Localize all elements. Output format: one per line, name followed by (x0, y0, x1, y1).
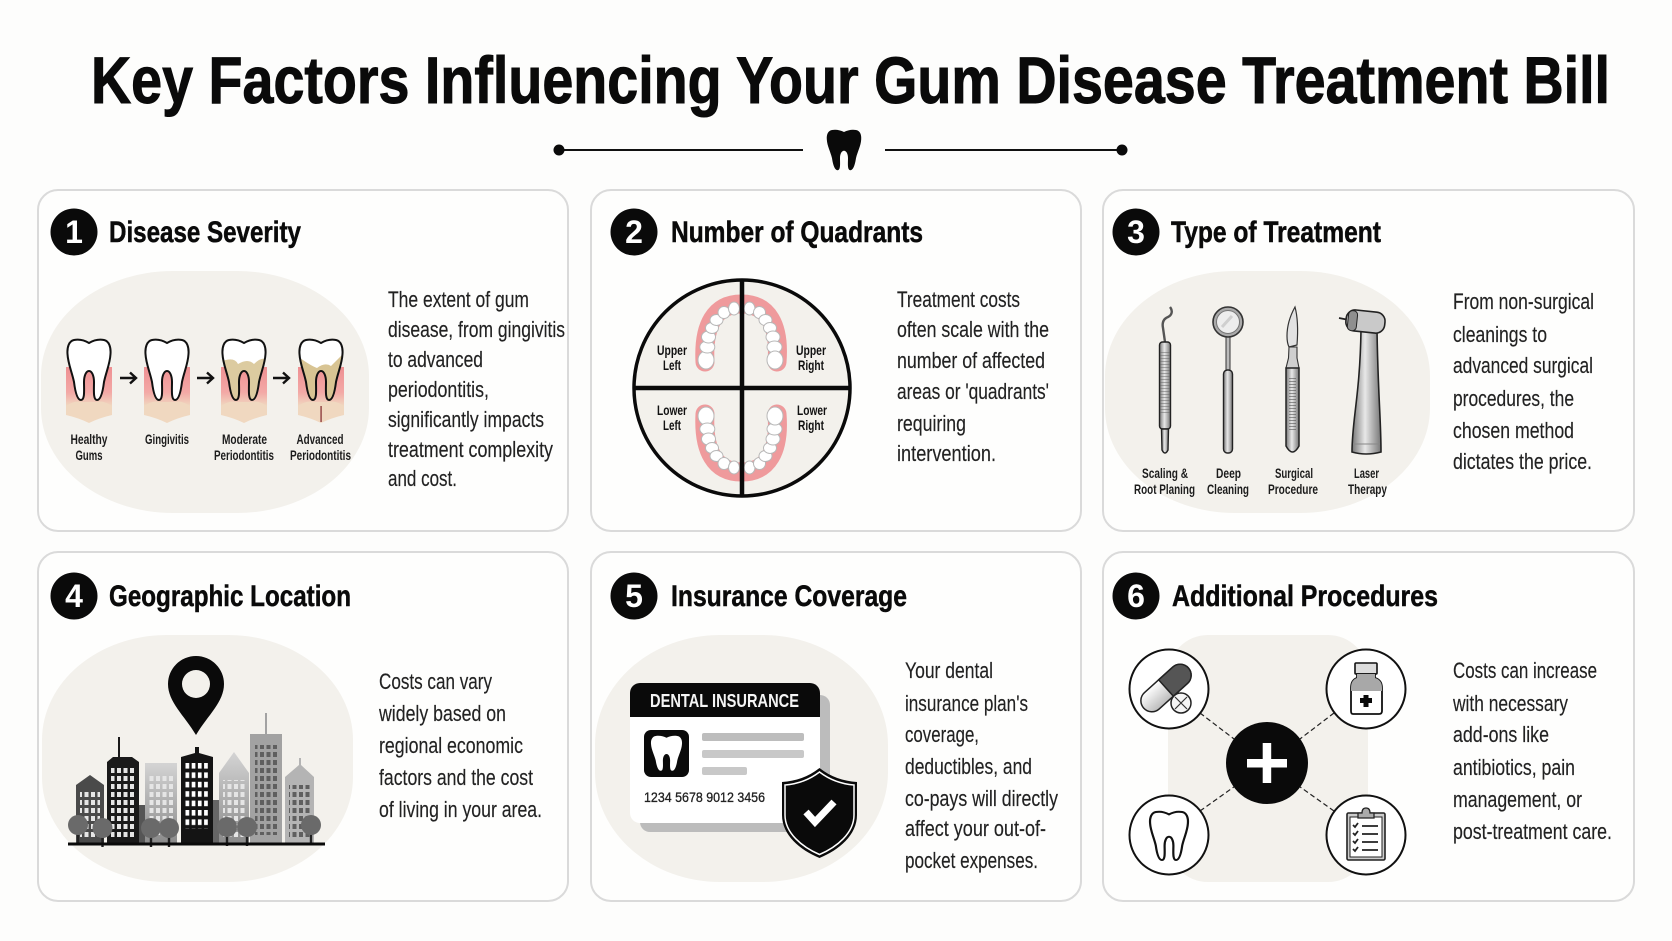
panel: insurance coverage (591, 552, 1081, 901)
number badge 1: 1 (65, 214, 83, 250)
description text (897, 287, 1049, 466)
icon: shield with check (782, 768, 857, 858)
heading: insurance coverage: Insurance Coverage (671, 580, 907, 613)
description text: regional economic (379, 733, 523, 758)
illustration backdrop (42, 635, 353, 882)
quadrant mouth diagram: Upper (657, 342, 687, 358)
panel: geographic location (38, 552, 568, 901)
description text: and cost. (388, 466, 457, 491)
description text: pocket expenses. (905, 848, 1038, 873)
description text: The extent of gum (388, 287, 529, 312)
number badge 3: 3 (1127, 214, 1145, 250)
icon: medicine bottle (1326, 650, 1406, 728)
panel: disease severity (38, 190, 568, 531)
description text: dictates the price. (1453, 449, 1592, 474)
heading: type of treatment: Type of Treatment (1171, 216, 1381, 249)
icon: clipboard checklist (1326, 796, 1406, 874)
description text: disease, from gingivitis (388, 317, 565, 342)
description text: procedures, the (1453, 386, 1574, 411)
panel: number of quadrants (591, 190, 1081, 531)
number badge 3 (1112, 208, 1160, 256)
description text: cleanings to (1453, 322, 1547, 347)
progression arrows (120, 372, 289, 384)
description text: periodontitis, (388, 377, 489, 402)
stage labels: Periodontitis (290, 448, 351, 463)
description text: areas or 'quadrants' (897, 379, 1049, 404)
icon: location pin (168, 656, 224, 735)
instrument labels: Scaling & (1142, 466, 1188, 481)
quadrant mouth diagram (634, 280, 850, 496)
stage labels: Gingivitis (145, 432, 189, 447)
quadrant mouth diagram: Lower (657, 402, 687, 418)
illustration backdrop (595, 635, 888, 882)
heading: disease severity: Disease Severity (109, 216, 301, 249)
instrument labels: Cleaning (1207, 482, 1249, 497)
instrument labels: Therapy (1348, 482, 1387, 497)
number badge 2: 2 (625, 214, 643, 250)
description text (905, 658, 1058, 873)
description text: intervention. (897, 441, 996, 466)
description text: factors and the cost (379, 765, 533, 790)
heading: additional procedures: Additional Procedures (1172, 580, 1438, 613)
description text: Your dental (905, 658, 993, 683)
description text: Treatment costs (897, 287, 1020, 312)
description text: Costs can vary (379, 669, 492, 694)
stage labels: Moderate (222, 432, 267, 447)
description text: chosen method (1453, 418, 1574, 443)
insurance card: 1234 5678 9012 3456 (644, 789, 765, 805)
description text: treatment complexity (388, 437, 553, 462)
stage labels: Advanced (296, 432, 344, 447)
description text: insurance plan's (905, 691, 1028, 716)
number badge 4: 4 (65, 578, 83, 614)
description text (388, 287, 565, 491)
description text: From non-surgical (1453, 289, 1594, 314)
description text: coverage, (905, 722, 979, 747)
gum disease progression teeth (66, 340, 345, 423)
description text: advanced surgical (1453, 353, 1593, 378)
quadrant mouth diagram: Left (663, 357, 681, 373)
description text: requiring (897, 411, 966, 436)
quadrant mouth diagram: Right (798, 417, 824, 433)
dashed connectors (1200, 713, 1334, 811)
number badge 5 (610, 572, 658, 620)
number badge 6 (1112, 572, 1160, 620)
instrument labels (1134, 466, 1387, 497)
description text: post-treatment care. (1453, 819, 1612, 844)
description text: with necessary (1452, 691, 1568, 716)
panel: additional procedures (1103, 552, 1634, 901)
instrument labels: Surgical (1275, 466, 1313, 481)
number badge 6: 6 (1127, 578, 1145, 614)
icon: laser handpiece (1339, 309, 1386, 454)
icon: dental mirror (1213, 307, 1243, 453)
instrument labels: Root Planing (1134, 482, 1195, 497)
insurance card: DENTAL INSURANCE (650, 691, 799, 711)
quadrant mouth diagram: Left (663, 417, 681, 433)
icon: scalpel (1286, 307, 1299, 452)
quadrant mouth diagram: Upper (796, 342, 826, 358)
panel: type of treatment (1103, 190, 1634, 531)
illustration backdrop (1168, 635, 1368, 882)
description text: of living in your area. (379, 797, 542, 822)
number badge 5: 5 (625, 578, 643, 614)
quadrant mouth diagram: Right (798, 357, 824, 373)
description text (1453, 289, 1594, 474)
icon: tooth outline (1130, 796, 1208, 874)
description text (1452, 658, 1612, 844)
quadrant mouth diagram: Lower (797, 402, 827, 418)
illustration backdrop (1105, 271, 1430, 513)
heading: geographic location: Geographic Location (109, 580, 351, 613)
description text: affect your out-of- (905, 816, 1046, 841)
description text: widely based on (378, 701, 506, 726)
number badge 4 (50, 572, 98, 620)
title divider with tooth icon (554, 130, 1128, 170)
description text (378, 669, 542, 822)
description text: to advanced (388, 347, 483, 372)
description text: number of affected (897, 348, 1045, 373)
description text: Costs can increase (1453, 658, 1597, 683)
stage labels: Gums (76, 448, 102, 463)
number badge 1 (50, 208, 98, 256)
instrument labels: Procedure (1268, 482, 1318, 497)
icon: antibiotics pill (1130, 650, 1208, 728)
number badge 2 (610, 208, 658, 256)
stage labels: Periodontitis (214, 448, 274, 463)
description text: management, or (1453, 787, 1582, 812)
illustration backdrop (41, 271, 369, 513)
stage labels: Healthy (70, 432, 108, 447)
icon: scaler instrument (1160, 307, 1172, 453)
description text: co-pays will directly (905, 786, 1058, 811)
instrument labels: Laser (1354, 466, 1380, 481)
instrument labels: Deep (1216, 466, 1241, 481)
insurance card (630, 683, 830, 832)
heading: number of quadrants: Number of Quadrants (671, 216, 923, 249)
description text: antibiotics, pain (1453, 755, 1575, 780)
description text: add-ons like (1453, 722, 1549, 747)
description text: deductibles, and (905, 754, 1032, 779)
description text: often scale with the (897, 317, 1049, 342)
stage labels (70, 432, 351, 463)
description text: significantly impacts (388, 407, 544, 432)
city skyline (68, 713, 325, 847)
icon: central plus (1226, 722, 1308, 804)
